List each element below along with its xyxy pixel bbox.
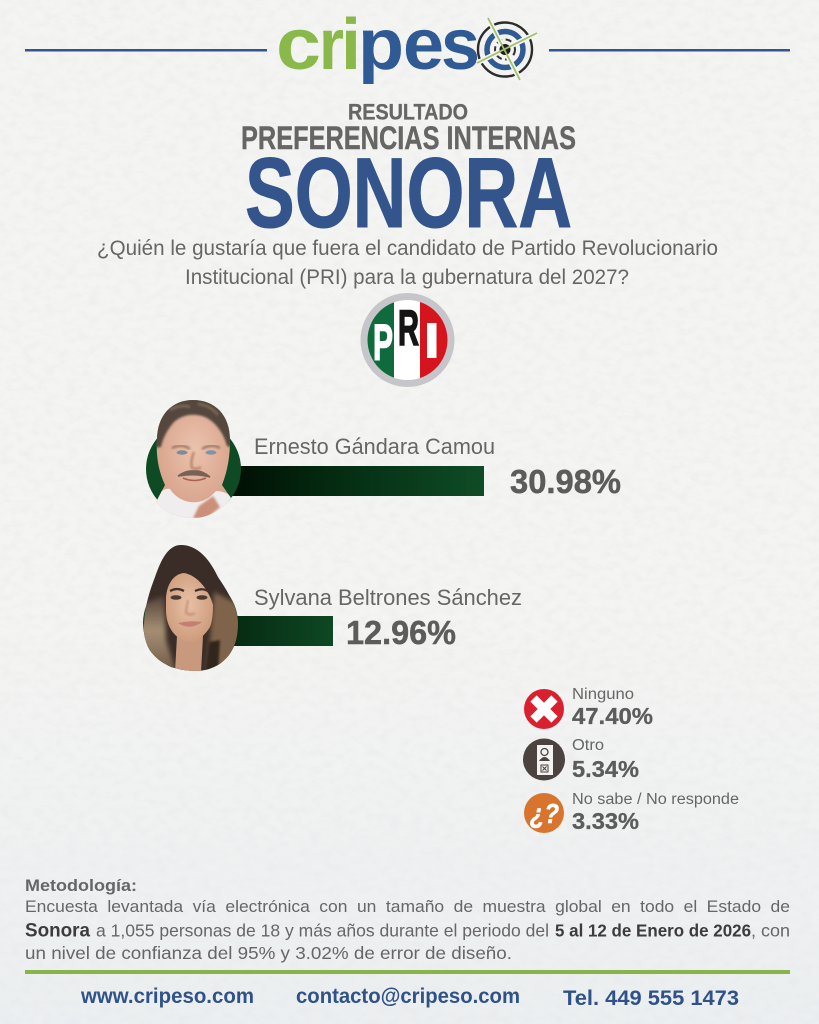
bar 12.96% [232, 616, 333, 646]
name: Sylvana Beltrones Sánchez [254, 585, 522, 610]
value: 30.98% [510, 464, 621, 501]
methodology text: un nivel de confianza del 95% y 3.02% de error de diseño. [25, 943, 512, 963]
logo wordmark: r [319, 5, 344, 85]
title: preferencias internas: PREFERENCIAS INTERNAS [241, 120, 576, 156]
value: 5.34% [572, 756, 639, 782]
portrait: woman [144, 545, 238, 671]
label: No sabe / No responde [572, 791, 739, 808]
icon: question marks [524, 793, 564, 833]
option: Ninguno [524, 686, 653, 729]
title: resultado: RESULTADO [348, 100, 468, 124]
logo wordmark: i [341, 5, 361, 85]
footer contacts: contacto@cripeso.com [296, 985, 520, 1008]
candidate: Ernesto Gándara Camou [146, 395, 621, 525]
label: Ninguno [572, 686, 634, 703]
icon: ballot [523, 738, 565, 780]
logo wordmark: e [403, 5, 444, 85]
logo: cripeso [276, 5, 537, 85]
icon: PRI logo [360, 293, 454, 387]
logo wordmark: c [276, 5, 321, 85]
title: sonora: SONORA [245, 137, 572, 248]
label: Otro [572, 737, 604, 754]
option: No sabe / No responde [524, 791, 739, 834]
methodology text [25, 876, 790, 963]
icon: red X [524, 689, 564, 729]
candidate: Sylvana Beltrones Sánchez [140, 540, 522, 675]
portrait circle [143, 576, 238, 670]
methodology text: Metodología: [25, 876, 137, 895]
logo wordmark [276, 5, 480, 85]
option: Otro [523, 737, 639, 782]
header rule right [549, 49, 790, 52]
footer contacts [80, 985, 739, 1010]
survey question [97, 236, 718, 289]
header rule left [25, 49, 267, 52]
methodology text: 5 al 12 de Enero de 2026 [555, 920, 751, 940]
portrait: man [156, 400, 231, 518]
methodology text: Encuesta levantada vía electrónica con un tamaño de muestra global en todo el Estado de [25, 897, 790, 916]
value: 3.33% [572, 808, 639, 834]
name: Ernesto Gándara Camou [254, 434, 495, 459]
survey question: ¿Quién le gustaría que fuera el candidato de Partido Revolucionario [97, 236, 718, 260]
footer contacts: www.cripeso.com [80, 985, 254, 1008]
bar 30.98% [232, 466, 484, 496]
methodology text: Sonora [25, 920, 90, 942]
methodology text: a 1,055 personas de 18 y más años durante el periodo del [96, 920, 549, 940]
survey question: Institucional (PRI) para la gubernatura del 2027? [185, 265, 629, 289]
portrait circle [146, 422, 241, 516]
value: 47.40% [572, 703, 653, 729]
icon: target [477, 18, 537, 80]
icon: question marks: ¿? [530, 798, 559, 829]
icon: PRI logo: P [373, 314, 393, 371]
green divider [25, 970, 790, 974]
methodology text: , con [751, 920, 790, 940]
logo wordmark: s [441, 5, 480, 85]
footer contacts: Tel. 449 555 1473 [563, 987, 739, 1010]
logo wordmark: p [358, 5, 404, 85]
icon: PRI logo: R [398, 300, 419, 356]
value: 12.96% [346, 615, 456, 652]
